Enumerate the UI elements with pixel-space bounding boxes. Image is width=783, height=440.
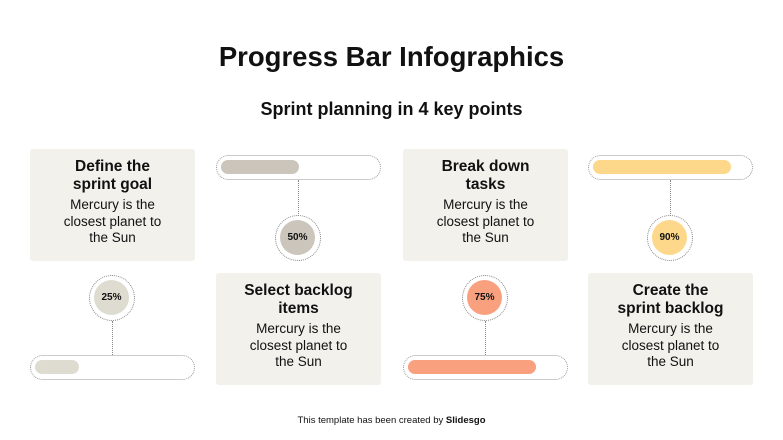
- text box: Select backlog: [244, 282, 353, 299]
- circle 90%: 90%: [659, 232, 680, 243]
- circle 50%: [275, 215, 321, 261]
- connector: [485, 321, 486, 355]
- text box: tasks: [466, 176, 505, 193]
- connector: [670, 180, 671, 216]
- text box: Mercury is the: [628, 321, 713, 336]
- text box: sprint backlog: [618, 300, 723, 317]
- progress bar 90%: [588, 155, 753, 180]
- footer credit: This template has been created by Slidesgo: [298, 415, 486, 426]
- circle 75%: 75%: [474, 292, 494, 303]
- text box: items: [278, 300, 319, 317]
- text box: Break down: [442, 158, 529, 175]
- text box: [403, 149, 568, 261]
- circle 90%: [647, 215, 693, 261]
- connector: [112, 321, 113, 355]
- text box: the Sun: [647, 354, 694, 369]
- panel: select backlog items: [216, 155, 381, 385]
- text box: [30, 149, 195, 261]
- text box: closest planet to: [622, 338, 719, 352]
- text box: closest planet to: [64, 214, 161, 228]
- panel: create the sprint backlog: [588, 155, 753, 385]
- text box: [588, 273, 753, 385]
- progress bar 50%: [216, 155, 381, 180]
- text box: closest planet to: [437, 214, 534, 228]
- progress bar 25%: [30, 355, 195, 380]
- progress bar 75%: [403, 355, 568, 380]
- text box: [216, 273, 381, 385]
- circle 75%: [462, 275, 508, 321]
- text box: the Sun: [275, 354, 322, 369]
- panel: define the sprint goal: [30, 149, 195, 380]
- circle 50%: 50%: [287, 232, 308, 243]
- circle 25%: [89, 275, 135, 321]
- text box: the Sun: [462, 230, 509, 245]
- text box: closest planet to: [250, 338, 347, 352]
- connector: [298, 180, 299, 216]
- text box: Mercury is the: [256, 321, 341, 336]
- text box: Define the: [75, 158, 150, 175]
- panel: break down tasks: [403, 149, 568, 380]
- title: Progress Bar Infographics: [219, 41, 564, 72]
- text box: Mercury is the: [443, 197, 528, 212]
- circle 25%: 25%: [101, 292, 122, 303]
- text box: sprint goal: [73, 176, 152, 193]
- subtitle: Sprint planning in 4 key points: [260, 99, 523, 119]
- text box: Mercury is the: [70, 197, 155, 212]
- text box: the Sun: [89, 230, 136, 245]
- text box: Create the: [633, 282, 708, 299]
